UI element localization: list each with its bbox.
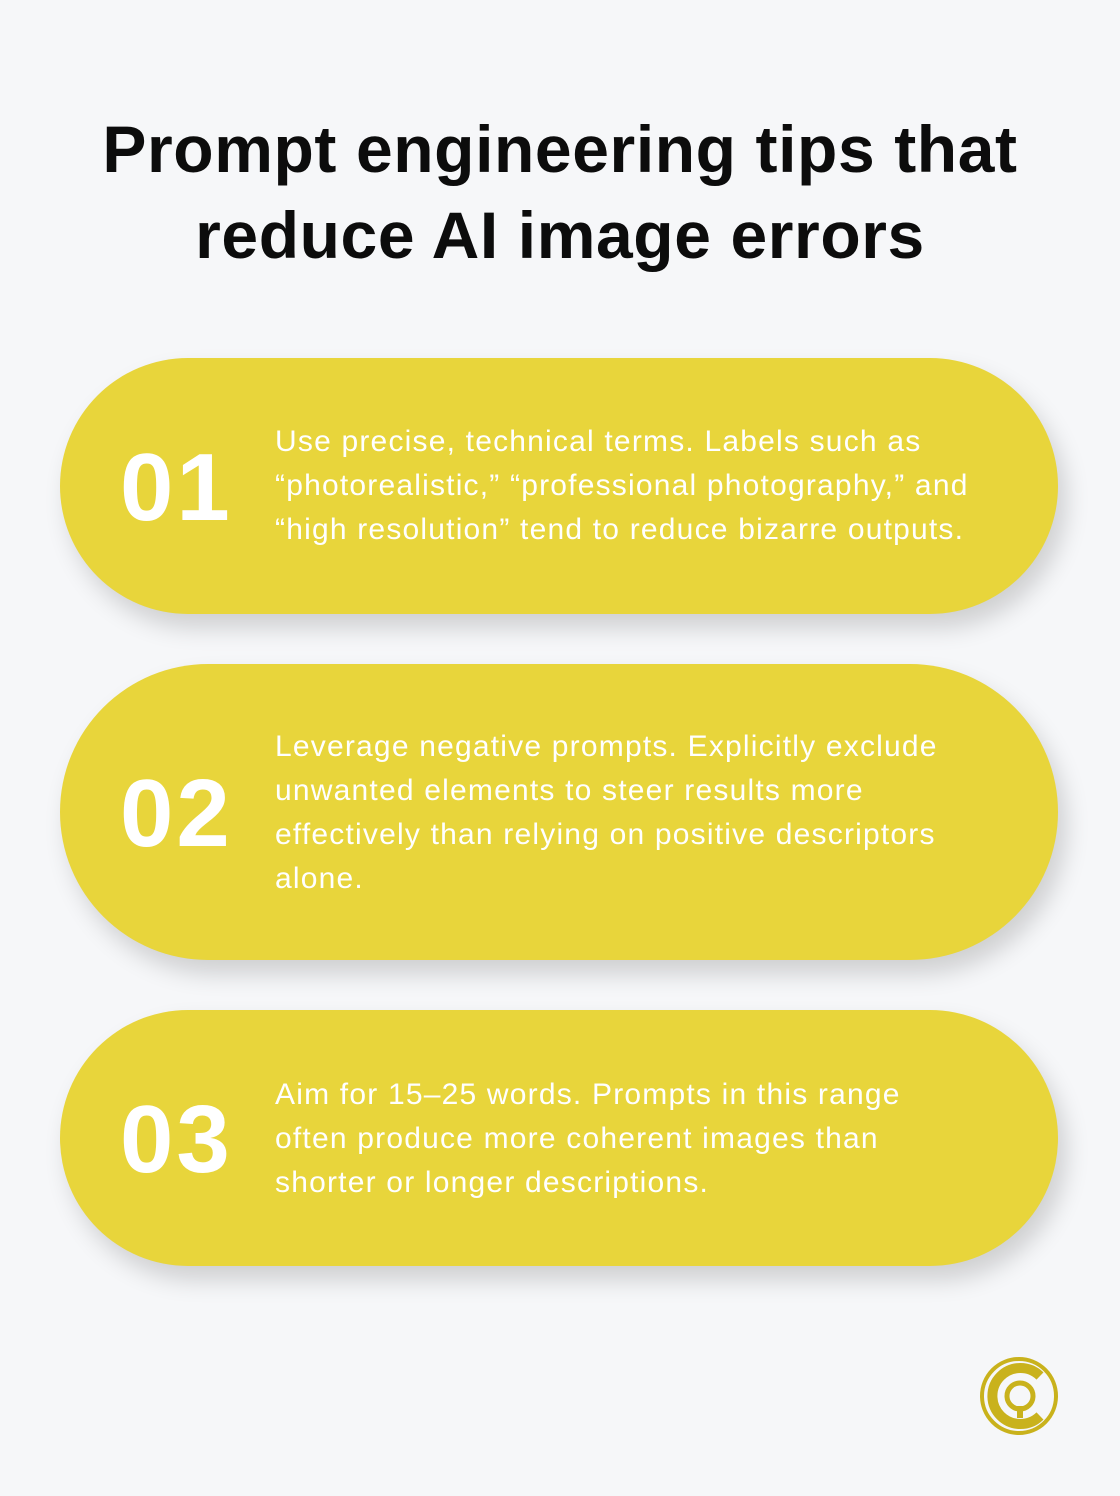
panel: tip 01 bbox=[60, 358, 1058, 614]
text 02: unwanted elements to steer results more bbox=[275, 774, 864, 807]
text 03: Aim for 15–25 words. Prompts in this range bbox=[275, 1078, 901, 1111]
text 01 bbox=[275, 425, 969, 546]
title: reduce AI image errors bbox=[195, 198, 925, 272]
title bbox=[102, 112, 1018, 272]
text 01: “photorealistic,” “professional photography,” and bbox=[275, 469, 969, 502]
text 03: shorter or longer descriptions. bbox=[275, 1166, 709, 1199]
panel: tip 02 bbox=[60, 664, 1058, 960]
text 02: Leverage negative prompts. Explicitly exclude bbox=[275, 730, 938, 763]
number 01: 01 bbox=[120, 434, 233, 541]
text 02: alone. bbox=[275, 862, 364, 895]
text 02: effectively than relying on positive descriptors bbox=[275, 818, 936, 851]
text 02 bbox=[275, 730, 938, 895]
number 03: 03 bbox=[120, 1086, 233, 1193]
panel: tip 03 bbox=[60, 1010, 1058, 1266]
icon: logo bbox=[980, 1357, 1058, 1435]
number 02: 02 bbox=[120, 760, 233, 867]
text 01: Use precise, technical terms. Labels such as bbox=[275, 425, 921, 458]
text 01: “high resolution” tend to reduce bizarre outputs. bbox=[275, 513, 964, 546]
text 03: often produce more coherent images than bbox=[275, 1122, 879, 1155]
title: Prompt engineering tips that bbox=[102, 112, 1018, 186]
text 03 bbox=[275, 1078, 901, 1199]
